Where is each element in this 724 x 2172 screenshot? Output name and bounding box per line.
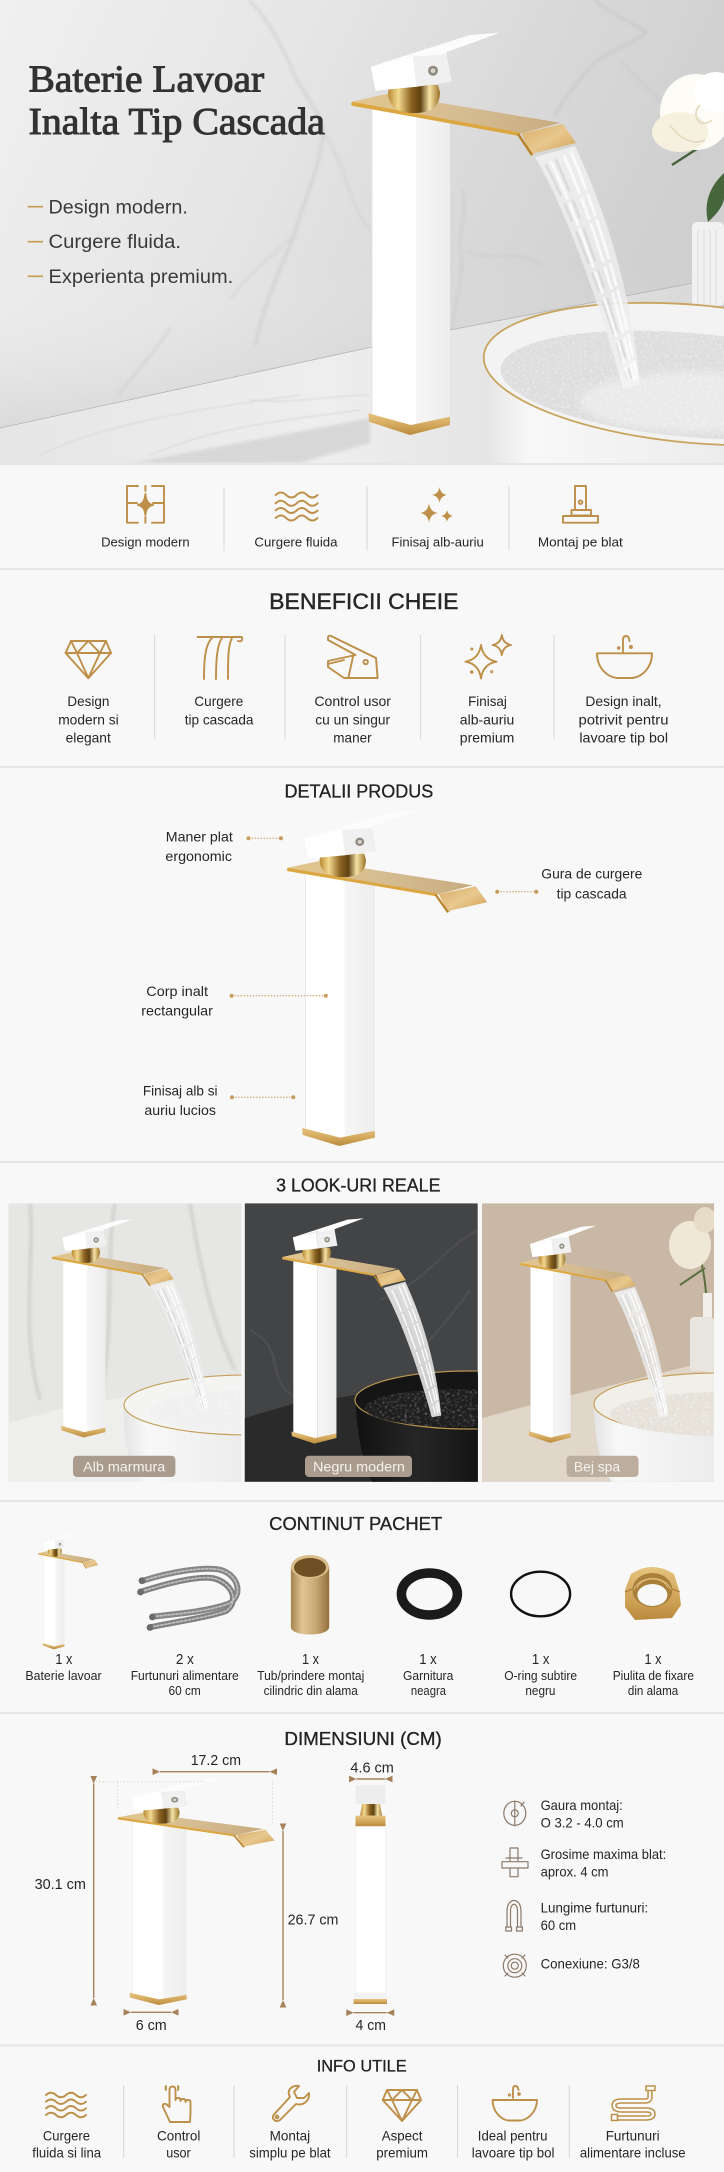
spec: grosime blat: aprox. 4 cm	[541, 1864, 608, 1880]
front faucet	[118, 1778, 275, 2005]
icon: design modern	[127, 486, 164, 523]
item: black gasket	[401, 1573, 457, 1615]
item quantities and names: 2 x	[176, 1651, 194, 1668]
panel: alb marmura	[8, 1203, 242, 1482]
hero bullet list: Curgere fluida.	[48, 232, 181, 253]
item: brass nut	[625, 1567, 681, 1620]
hero bullet list: Experienta premium.	[48, 267, 233, 288]
heading: 3 look-uri: 3 LOOK-URI REALE	[276, 1176, 440, 1196]
icon: counter thickness	[502, 1848, 528, 1877]
spec: grosime blat	[502, 1846, 666, 1880]
callout: maner plat: Maner plat	[166, 829, 233, 845]
icon: waves	[46, 2093, 86, 2117]
product faucet	[287, 810, 487, 1146]
benefit 5 text: potrivit pentru	[578, 711, 668, 727]
section: dimensiuni	[35, 1729, 666, 2034]
item quantities and names: 1 x	[419, 1651, 437, 1668]
info 3 text: simplu pe blat	[249, 2144, 331, 2160]
spec: lungime furtunuri: Lungime furtunuri:	[541, 1900, 648, 1916]
item quantities and names: neagra	[411, 1683, 447, 1698]
item quantities and names: Baterie lavoar	[25, 1668, 102, 1683]
benefit 1 text: Design	[67, 693, 109, 709]
faucet shadow on counter	[133, 418, 370, 463]
hero title: Baterie Lavoar	[29, 59, 264, 101]
item: o-ring	[511, 1572, 570, 1616]
benefit 2 text	[185, 693, 254, 727]
hero panel	[0, 0, 724, 463]
benefit 2 text: Curgere	[194, 693, 243, 709]
panel: bej spa	[482, 1203, 724, 1482]
item quantities and names: Furtunuri alimentare	[131, 1668, 239, 1683]
section: continut pachet	[25, 1514, 694, 1698]
hero flower	[652, 72, 724, 222]
benefit 5 text	[578, 693, 668, 746]
info 6 text	[580, 2128, 686, 2160]
caption pill: alb marmura	[73, 1456, 175, 1477]
dimension: base 4 cm: 4 cm	[356, 2017, 386, 2034]
benefit 3 text: Control usor	[314, 693, 391, 709]
callout: maner plat	[165, 829, 283, 864]
benefit 1 text	[58, 693, 119, 746]
heading: dimensiuni: DIMENSIUNI (CM)	[284, 1729, 442, 1749]
icon: wrench	[273, 2086, 309, 2121]
hero counter	[0, 277, 724, 463]
item: brass tube	[291, 1555, 329, 1634]
info 1 text: fluida si lina	[32, 2144, 101, 2160]
item quantities and names: 1 x	[302, 1651, 319, 1668]
item quantities and names	[25, 1651, 694, 1698]
dimension: height 30.1 cm: 30.1 cm	[35, 1876, 86, 1893]
item quantities and names: Piulita de fixare	[613, 1668, 694, 1683]
dimension: base 6 cm	[131, 2012, 171, 2034]
item quantities and names: 1 x	[644, 1651, 662, 1668]
section: beneficii cheie	[58, 589, 668, 746]
icon: outline sparkles	[466, 635, 511, 678]
icon: bowl	[493, 2086, 537, 2120]
benefit 1 text: elegant	[66, 730, 111, 746]
icon: hand	[163, 2086, 190, 2122]
icon: lever handle	[328, 636, 378, 678]
hero vase	[692, 222, 724, 306]
callout: corp inalt: Corp inalt	[146, 983, 208, 999]
side view faucet	[354, 1785, 387, 2004]
label: curgere fluida: Curgere fluida	[254, 535, 338, 550]
info 4 text: Aspect	[382, 2128, 422, 2144]
info 5 text: lavoare tip bol	[472, 2144, 554, 2160]
section: detalii produs	[141, 782, 643, 1146]
info 6 text: Furtunuri	[606, 2128, 660, 2144]
flowers and vase	[669, 1207, 716, 1371]
info 1 text: Curgere	[43, 2128, 90, 2144]
section: 3 look-uri reale	[8, 1176, 724, 1482]
heading: info utile: INFO UTILE	[317, 2057, 407, 2076]
info 3 text: Montaj	[270, 2128, 310, 2144]
benefit 2 text: tip cascada	[185, 711, 254, 727]
caption pill: bej spa: Bej spa	[574, 1459, 620, 1475]
hero title: Inalta Tip Cascada	[29, 101, 325, 143]
benefit 4 text	[460, 693, 514, 746]
heading: beneficii cheie: BENEFICII CHEIE	[269, 589, 459, 614]
benefit 4 text: alb-auriu	[460, 711, 514, 727]
callout: finisaj: Finisaj alb si	[143, 1083, 218, 1099]
hero marble wall	[0, 0, 724, 463]
item quantities and names: 1 x	[532, 1651, 550, 1668]
hero bullet list: Design modern.	[48, 197, 188, 218]
icon: diamond	[66, 641, 111, 678]
spec: gaura montaj: Gaura montaj:	[541, 1797, 623, 1813]
icon: counter mount	[563, 486, 598, 523]
benefit 5 text: Design inalt,	[585, 693, 662, 709]
hero title	[29, 59, 325, 143]
heading: detalii produs: DETALII PRODUS	[284, 782, 433, 802]
icon: hose	[506, 1900, 522, 1931]
label: finisaj alb-auriu: Finisaj alb-auriu	[392, 535, 484, 550]
hero bullet list	[28, 197, 233, 288]
item quantities and names: Garnitura	[403, 1668, 454, 1683]
heading: continut pachet: CONTINUT PACHET	[269, 1514, 442, 1534]
info 2 text: usor	[166, 2144, 191, 2160]
icon: vessel bowl	[597, 636, 652, 678]
benefit 5 text: lavoare tip bol	[579, 730, 668, 746]
panel: negru modern	[244, 1203, 478, 1482]
caption pill: negru modern	[305, 1456, 412, 1477]
item: faucet thumbnail	[38, 1533, 98, 1649]
spec: grosime blat: Grosime maxima blat:	[541, 1846, 666, 1862]
feature strip	[101, 486, 623, 551]
benefit 4 text: Finisaj	[468, 693, 507, 709]
hero bottom line	[0, 463, 724, 465]
callout: gura de curgere	[495, 865, 643, 901]
spec: gaura montaj: O 3.2 - 4.0 cm	[541, 1814, 624, 1830]
icon: cascade	[198, 637, 242, 679]
caption pill: negru modern: Negru modern	[313, 1459, 405, 1475]
info 5 text: Ideal pentru	[478, 2128, 548, 2144]
spec: conexiune	[503, 1954, 640, 1977]
info 2 text	[157, 2128, 200, 2160]
dimension: width 17.2 cm	[160, 1752, 270, 1772]
dimension: top 4.6 cm: 4.6 cm	[350, 1759, 394, 1776]
icon: waves	[276, 492, 318, 520]
item quantities and names: cilindric din alama	[264, 1683, 358, 1698]
info 3 text	[249, 2128, 331, 2160]
dimension: height 26.7 cm: 26.7 cm	[288, 1911, 338, 1928]
caption pill: alb marmura: Alb marmura	[83, 1459, 166, 1475]
benefit 3 text	[314, 693, 391, 746]
label: design modern: Design modern	[101, 535, 190, 550]
item quantities and names: O-ring subtire	[504, 1668, 577, 1683]
info 6 text: alimentare incluse	[580, 2144, 686, 2160]
caption pill: bej spa	[566, 1456, 638, 1477]
info 5 text	[472, 2128, 554, 2160]
benefit 4 text: premium	[460, 730, 514, 746]
icon: sparkles	[420, 487, 453, 523]
label: montaj pe blat: Montaj pe blat	[538, 535, 623, 550]
item quantities and names: Tub/prindere montaj	[257, 1668, 364, 1683]
spec: lungime furtunuri: 60 cm	[541, 1917, 576, 1933]
callout: corp inalt	[141, 983, 328, 1019]
hero faucet	[352, 33, 640, 435]
callout: finisaj	[143, 1083, 295, 1118]
benefit 1 text: modern si	[58, 711, 119, 727]
benefit 3 text: maner	[333, 730, 372, 746]
callout: gura de curgere: tip cascada	[557, 885, 627, 901]
item quantities and names: 1 x	[55, 1651, 73, 1668]
info 2 text: Control	[157, 2128, 200, 2144]
icon: connector	[503, 1954, 526, 1977]
item: hoses	[137, 1569, 238, 1631]
icon: hose	[612, 2086, 655, 2120]
info 4 text: premium	[376, 2144, 428, 2160]
benefit 3 text: cu un singur	[315, 711, 390, 727]
callout: maner plat: ergonomic	[165, 848, 232, 864]
spec: conexiune: Conexiune: G3/8	[541, 1955, 640, 1971]
item quantities and names: 60 cm	[168, 1683, 201, 1698]
section: info utile	[32, 2057, 686, 2160]
spec: gaura montaj	[504, 1797, 624, 1830]
item quantities and names: negru	[525, 1683, 555, 1698]
icon: diamond	[383, 2090, 421, 2121]
callout: finisaj: auriu lucios	[144, 1102, 216, 1118]
dimension: base 6 cm: 6 cm	[136, 2017, 167, 2034]
dimension: width 17.2 cm: 17.2 cm	[191, 1752, 241, 1769]
spec: lungime furtunuri	[506, 1900, 648, 1933]
info 4 text	[376, 2128, 428, 2160]
hero basin	[482, 302, 724, 463]
item quantities and names: din alama	[628, 1683, 679, 1698]
info 1 text	[32, 2128, 101, 2160]
icon: mounting hole	[504, 1801, 526, 1826]
callout: gura de curgere: Gura de curgere	[541, 865, 643, 881]
callout: corp inalt: rectangular	[141, 1003, 213, 1019]
